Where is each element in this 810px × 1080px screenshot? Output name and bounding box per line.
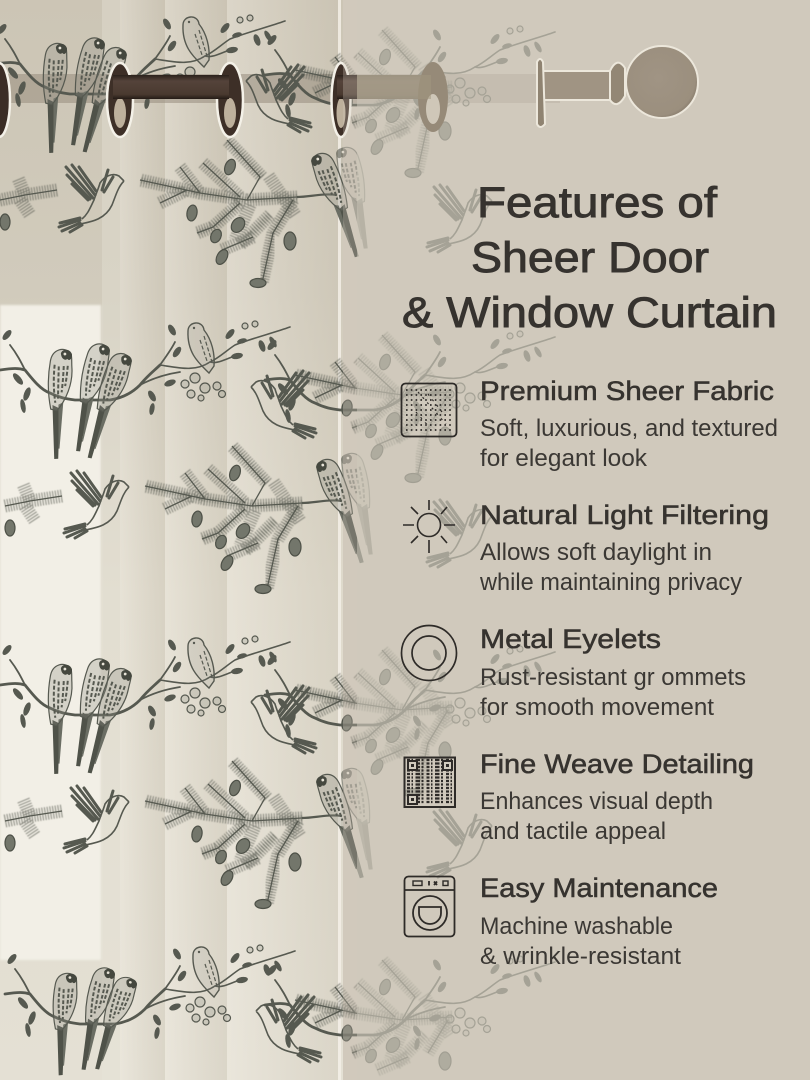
description: Enhances visual depth — [480, 788, 713, 815]
eyelet ring 3 — [332, 63, 350, 137]
icon: washing machine — [404, 876, 454, 936]
heading: Metal Eyelets — [480, 624, 661, 654]
description: while maintaining privacy — [479, 569, 742, 596]
rod finial — [537, 46, 698, 127]
rod section between rings 1 and 2 — [113, 75, 229, 99]
curtain rod with eyelet rings — [0, 63, 432, 137]
title: & Window Curtain — [402, 289, 777, 337]
title: Sheer Door — [471, 234, 709, 282]
curtain bird and branch pattern — [0, 15, 374, 1075]
description: and tactile appeal — [480, 818, 666, 845]
heading: Fine Weave Detailing — [480, 749, 754, 779]
faded curtain motifs behind the panel — [265, 26, 555, 1070]
description: Rust-resistant gr ommets — [480, 664, 746, 691]
description: for smooth movement — [480, 694, 714, 721]
icon: fabric swatch — [402, 384, 456, 436]
description: & wrinkle-resistant — [480, 943, 681, 970]
title: Features of — [477, 179, 718, 227]
eyelet ring 2 — [217, 63, 243, 137]
description: Soft, luxurious, and textured — [480, 415, 778, 442]
feature: easy maintenance — [404, 873, 718, 970]
description: Allows soft daylight in — [480, 539, 712, 566]
rod end ring — [357, 62, 448, 132]
icon: eyelet rings — [402, 626, 456, 680]
description: for elegant look — [480, 445, 648, 472]
feature: natural light filtering — [403, 500, 769, 596]
icon: sun — [403, 500, 455, 553]
heading: Easy Maintenance — [480, 873, 718, 903]
feature: premium sheer fabric — [402, 376, 778, 472]
eyelet ring: far left — [0, 63, 10, 137]
feature: metal eyelets — [402, 624, 746, 721]
description: Machine washable — [480, 913, 673, 940]
description — [480, 913, 681, 970]
description — [480, 664, 746, 721]
eyelet ring 1 — [107, 63, 133, 137]
description — [479, 539, 742, 596]
heading: Natural Light Filtering — [480, 500, 769, 530]
title — [402, 179, 777, 337]
translucent feature panel — [343, 0, 810, 1080]
description — [480, 788, 713, 845]
description — [480, 415, 778, 472]
heading: Premium Sheer Fabric — [480, 376, 774, 406]
feature: fine weave detailing — [404, 749, 754, 845]
icon: weave pattern — [404, 758, 455, 807]
rod section to ring 4 — [337, 75, 432, 99]
